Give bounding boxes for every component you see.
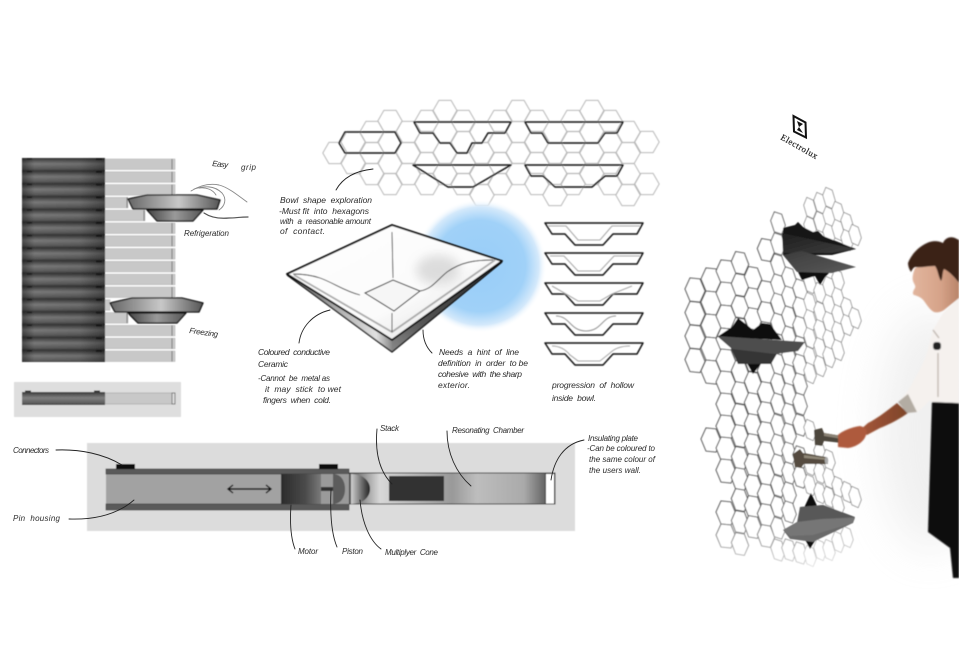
label: multiplyer cone bbox=[360, 500, 439, 557]
label: insulating plate: the same colour of bbox=[589, 455, 656, 464]
panel: pin cross-section bbox=[87, 443, 575, 531]
arrow: leader to ceramic bbox=[299, 310, 330, 343]
cross-section labels bbox=[13, 424, 656, 557]
profile 3 bbox=[545, 283, 643, 305]
text: progression of hollow caption: inside bowl. bbox=[552, 393, 596, 403]
upper stacked dark bowls bbox=[782, 222, 856, 285]
label: insulating plate: the users wall. bbox=[589, 466, 641, 475]
text: line definition note: definition in order to be bbox=[438, 358, 528, 368]
lower grey bowl bbox=[783, 493, 855, 549]
chart: hexagon bowl shape exploration grid bbox=[323, 100, 659, 206]
label: piston bbox=[331, 490, 364, 556]
label: connectors: Connectors bbox=[13, 446, 49, 455]
text: easy grip: grip bbox=[241, 163, 257, 172]
shirt folds and tie bbox=[933, 330, 941, 397]
bowl on pins: refrigeration bbox=[128, 195, 220, 221]
text: coloured conductive ceramic note: -Cannot be metal as bbox=[258, 374, 330, 383]
text: bowl shape exploration note: Bowl shape exploration bbox=[280, 195, 372, 205]
piston bbox=[321, 474, 349, 504]
forearm bbox=[860, 403, 908, 435]
bowl left skirt bbox=[287, 274, 392, 352]
text: bowl shape exploration note: -Must fit into hexagons bbox=[279, 206, 370, 216]
connectors bbox=[116, 464, 338, 469]
text: line definition note bbox=[438, 347, 528, 390]
lower wall fade bbox=[690, 510, 870, 575]
face and neck bbox=[913, 265, 959, 312]
hexagon cells far-right fading columns bbox=[804, 187, 861, 567]
hair bbox=[908, 237, 959, 283]
corner fold lines and waves bbox=[293, 232, 493, 332]
panel: fridge wall with sliding pins bbox=[22, 158, 220, 362]
icon: blue glow behind bowl bbox=[413, 199, 547, 333]
bowl on pins: freezing bbox=[110, 298, 203, 323]
label: stack: Stack bbox=[380, 424, 400, 433]
logo: Electrolux bbox=[779, 116, 820, 161]
text: coloured conductive ceramic note: it may stick to wet bbox=[265, 384, 342, 394]
label: stack bbox=[377, 424, 400, 484]
text: easy grip: Easy bbox=[212, 159, 230, 170]
label: insulating plate: -Can be coloured to bbox=[587, 444, 656, 453]
profile 5 bbox=[545, 343, 643, 365]
label: pin housing bbox=[13, 500, 134, 523]
bowl right skirt bbox=[392, 261, 502, 352]
arrow: leader to hexagon grid bbox=[336, 169, 373, 190]
profile 2 bbox=[545, 253, 643, 275]
middle dark bowl bbox=[717, 318, 805, 374]
chart: progression of hollow profiles bbox=[545, 223, 643, 365]
bowl basin bbox=[287, 225, 502, 340]
label: multiplyer cone: Multiplyer Cone bbox=[385, 548, 439, 557]
text: line definition note: cohesive with the sharp bbox=[438, 369, 522, 379]
text: coloured conductive ceramic note: Coloured conductive bbox=[258, 347, 330, 357]
logo: Electrolux: Electrolux bbox=[779, 132, 820, 161]
hand bbox=[838, 426, 867, 448]
text: easy grip bbox=[212, 159, 257, 172]
profile 4 bbox=[545, 313, 643, 335]
label: pin housing: Pin housing bbox=[13, 514, 61, 523]
housing walls bbox=[106, 469, 349, 510]
text: coloured conductive ceramic note: fingers when cold. bbox=[263, 395, 331, 405]
label: motor bbox=[290, 505, 318, 556]
multiplyer cone bbox=[351, 474, 370, 504]
wall shadow around woman bbox=[880, 310, 959, 550]
insulating plate bbox=[546, 474, 554, 504]
hexagon cells left columns bbox=[685, 260, 736, 548]
pin housing body bbox=[106, 474, 349, 504]
hexagon cells right columns bbox=[771, 212, 807, 564]
inner rim bbox=[294, 260, 495, 332]
dark pin housing stack bbox=[22, 158, 105, 362]
section background bbox=[87, 443, 575, 531]
resonating chamber tube bbox=[349, 473, 555, 504]
pin held by hand bbox=[814, 428, 842, 446]
grey shading on basin bbox=[416, 255, 460, 285]
floor of bowl bbox=[365, 280, 420, 311]
apron bbox=[928, 401, 959, 578]
illustration: hexagon wall bbox=[685, 187, 870, 575]
label: piston: Piston bbox=[342, 547, 364, 556]
arrow: leader to sharp exterior bbox=[423, 330, 432, 353]
label: resonating chamber: Resonating Chamber bbox=[452, 426, 524, 435]
icon: sketched hand gripping bowl bbox=[191, 184, 248, 218]
light extended pins bbox=[105, 159, 175, 362]
hexagon cells centre columns bbox=[731, 239, 775, 555]
text: progression of hollow caption bbox=[551, 380, 635, 403]
text: refrigeration: Refrigeration bbox=[184, 229, 230, 238]
text: coloured conductive ceramic note: Ceramic bbox=[258, 359, 289, 369]
text: line definition note: Needs a hint of line bbox=[439, 347, 519, 357]
arrow: pin travel direction bbox=[228, 485, 271, 493]
pin insulating end caps bbox=[127, 159, 172, 362]
bowl shape outlines bbox=[339, 122, 623, 187]
shirt bbox=[898, 298, 959, 413]
text: bowl shape exploration note: with a reasonable amount bbox=[280, 217, 372, 226]
label: resonating chamber bbox=[447, 426, 524, 486]
profile 1 bbox=[545, 223, 643, 245]
label: motor: Motor bbox=[298, 547, 318, 556]
text: bowl shape exploration note: of contact. bbox=[280, 226, 325, 236]
text: progression of hollow caption: progression of hollow bbox=[551, 380, 635, 390]
second extended pin bbox=[793, 449, 828, 468]
label: connectors bbox=[13, 446, 122, 465]
illustration: woman reaching for pin bbox=[838, 237, 959, 578]
panel: pin side view bbox=[14, 382, 181, 417]
label: insulating plate bbox=[551, 434, 656, 480]
text: line definition note: exterior. bbox=[438, 380, 470, 390]
text: freezing: Freezing bbox=[189, 326, 219, 339]
text: bowl shape exploration note bbox=[279, 195, 372, 236]
illustration: square ceramic bowl bbox=[287, 225, 502, 352]
rolled cuff bbox=[898, 394, 917, 413]
stack bbox=[389, 476, 444, 501]
label: insulating plate: Insulating plate bbox=[588, 434, 639, 443]
text: coloured conductive ceramic note bbox=[258, 347, 342, 405]
outer skirt edges bbox=[287, 262, 502, 352]
motor bbox=[281, 474, 321, 504]
